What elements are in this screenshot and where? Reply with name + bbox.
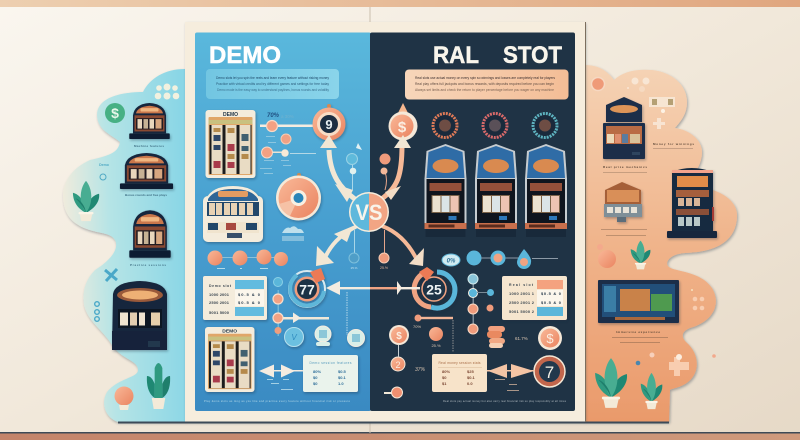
arrows around VS <box>316 135 424 335</box>
blue coin <box>274 278 282 286</box>
coin with dollar sign: $ <box>398 119 407 136</box>
cactus plant <box>147 363 170 409</box>
caption: Real prize mechanics <box>603 165 647 169</box>
icon: blue cross <box>105 269 117 281</box>
real info box: $25 <box>467 369 474 374</box>
large slot machine <box>112 281 167 350</box>
dollar medallion: $ <box>546 331 554 346</box>
slot machine 3 <box>129 210 171 258</box>
coin stack <box>487 326 505 348</box>
coral node row <box>208 250 288 269</box>
slider track <box>260 124 320 127</box>
comparison table: $0.5 & 0 <box>238 300 261 305</box>
small label and badge: Demo <box>99 163 109 167</box>
caption: Immersive experience <box>616 330 660 334</box>
slot machine 1 <box>129 103 170 139</box>
lucky 7 dial <box>534 356 565 387</box>
description box <box>405 70 568 100</box>
footnote: Real slots pay actual money but also carry real financial risk so play responsibly at all times <box>443 399 567 403</box>
panel: left teal blob <box>63 69 185 422</box>
small plant <box>641 373 662 409</box>
stat label <box>267 113 294 119</box>
caption 3: Practice sessions <box>130 263 166 267</box>
real slot machine 3 <box>525 144 567 237</box>
caption: Money for winnings <box>653 142 694 146</box>
icon: peach dots <box>691 289 704 310</box>
real info box: $1 <box>442 381 447 386</box>
icon: three blue rings <box>95 302 99 321</box>
description box <box>206 69 339 99</box>
icon: dollar coin: $ <box>111 105 119 121</box>
vs badge <box>349 192 389 232</box>
large plant <box>595 358 627 408</box>
footnote: Play demo slots as long as you like and practise every feature without financial risk or pressure <box>204 399 351 403</box>
description box: Always set limits and check the return to player percentage before you wager on any machine <box>415 88 554 92</box>
droplet node: 25.% <box>380 266 388 270</box>
droplet node <box>379 230 389 270</box>
arrow: up left <box>320 135 356 202</box>
real slot machine 1 <box>424 144 466 237</box>
demo info box: 80% <box>313 369 321 374</box>
flow node <box>266 120 278 132</box>
coral coin left <box>389 325 409 345</box>
caption 1: Machine features <box>134 144 164 148</box>
donut gauge <box>276 173 321 220</box>
decorative dots and plus <box>636 352 689 376</box>
gauge: 77 <box>289 268 325 307</box>
comparison table: 5001 5000 <box>209 310 230 315</box>
caption <box>653 142 694 149</box>
medallion 2 <box>483 114 507 138</box>
comparison table: Demo slot <box>209 284 232 288</box>
description box: Practice with virtual credits and try different games and settings for free today <box>216 82 329 86</box>
blue droplet nodes <box>346 143 362 190</box>
percent badge: 0% <box>447 258 456 264</box>
real table: 1000 2001 1 <box>509 291 535 296</box>
stat label: 37% <box>415 367 426 373</box>
heading: RAL STOT <box>433 42 562 69</box>
coral coin <box>597 244 616 268</box>
real slot machine 2 <box>604 182 642 222</box>
stat label: 70% <box>267 113 280 119</box>
arrow: horizontal link <box>326 281 420 295</box>
caption <box>612 330 668 343</box>
icon: film strip <box>649 97 675 113</box>
comparison table <box>203 276 267 320</box>
icon: peach coin <box>592 78 604 90</box>
real table: $0.5 & 0 <box>541 300 562 305</box>
arrow: down left <box>316 226 357 266</box>
demo info box: Demo session features <box>310 361 352 365</box>
stat label: 61.7% <box>515 336 528 341</box>
double arrow <box>487 364 535 378</box>
real info box: Real money session stats <box>438 361 481 365</box>
comparison table: $0.5 & 0 <box>238 292 261 297</box>
icon: cream dots <box>627 78 650 92</box>
coin ring with dark center <box>312 104 346 140</box>
gauge: 25 <box>414 267 455 308</box>
panel: demo side <box>195 32 371 411</box>
heading: DEMO: DEMO <box>209 42 281 69</box>
icon: green plant <box>73 181 99 221</box>
lucky 7 dial: 7 <box>545 363 554 382</box>
blue badge <box>284 328 304 346</box>
coral coin left: $ <box>396 331 402 342</box>
double arrow <box>259 364 304 378</box>
percent badge <box>442 254 460 266</box>
real slot machine 2 <box>475 144 517 237</box>
reel card top <box>206 110 256 178</box>
demo info box: $0.1 <box>338 375 347 380</box>
peach flow line <box>414 314 453 352</box>
stat label: 70% <box>413 324 421 329</box>
real info box <box>432 354 487 392</box>
coin small <box>429 327 443 341</box>
cream badge <box>348 330 364 346</box>
demo info box: $0.5 <box>338 369 347 374</box>
comparison table: 1000 2001 <box>209 292 230 297</box>
monitor <box>598 280 679 323</box>
description box: Demo mode is the easy way to understand paylines, bonus rounds and volatility <box>217 88 329 92</box>
coin with dollar sign <box>388 103 418 140</box>
small note <box>495 379 519 391</box>
caption 2: Bonus rounds and free plays <box>125 193 167 197</box>
icon: coral bulb <box>114 386 134 410</box>
caption <box>603 165 647 173</box>
blue mid node: 25.% <box>351 266 358 270</box>
arrow: down right <box>382 226 424 266</box>
real info box: $0 <box>442 375 447 380</box>
panel: center paper <box>118 22 669 424</box>
icon: dollar coin <box>105 103 125 123</box>
description box: Real play offers full jackpots and bonus rewards, with deposits required before you can begin <box>415 82 554 86</box>
icon: cream dots <box>155 84 179 100</box>
dollar medallion <box>538 326 562 350</box>
icon: plus sign <box>653 118 665 129</box>
gauge: 25: 25 <box>426 282 442 298</box>
small peach dot <box>712 354 716 358</box>
demo info box: $0 <box>313 381 318 386</box>
real info box: 80% <box>442 369 450 374</box>
stat label: 25.% <box>431 343 441 348</box>
description box: Real slots use actual money on every spin so winnings and losses are completely real for players <box>415 76 555 80</box>
real table <box>502 276 567 320</box>
comparison table: 2500 2001 <box>209 300 230 305</box>
reel card bottom <box>205 327 254 392</box>
description box: Demo slots let you spin the reels and learn every feature without risking money <box>216 76 329 80</box>
real table: $0.5 & 0 <box>541 291 562 296</box>
coin ring with dark center: 9 <box>325 117 333 132</box>
caption <box>601 229 647 236</box>
real table: Real slot <box>509 283 534 287</box>
flow node <box>281 134 291 144</box>
left coral nodes <box>384 345 405 398</box>
demo info box: 1.0 <box>338 381 344 386</box>
small label and badge <box>99 163 109 180</box>
real table: 2500 2001 2 <box>509 300 535 305</box>
coral droplets left <box>380 154 390 190</box>
blue and coral node row <box>466 249 558 269</box>
heading: RAL STOT: STOT <box>503 42 562 69</box>
heading: RAL STOT: RAL <box>433 42 479 69</box>
left coral nodes: 2 <box>395 360 401 370</box>
green plant <box>631 241 650 269</box>
medallion 3 <box>533 114 557 138</box>
tall slot machine <box>667 168 717 238</box>
vertical node chain <box>468 274 494 334</box>
medallion 1 <box>433 114 457 138</box>
stat label: a 30% <box>281 114 294 119</box>
cream badge <box>315 326 331 346</box>
panel: real slot side <box>370 32 575 411</box>
small note <box>267 379 293 390</box>
cloud icon <box>282 226 304 241</box>
real slot machine 1 <box>603 97 645 159</box>
dashed connector <box>346 292 348 335</box>
vs badge: VS <box>356 200 382 225</box>
small captions <box>260 136 291 174</box>
arrow: up right <box>380 135 411 200</box>
panel: right peach blob <box>585 65 737 422</box>
medallions <box>433 114 557 138</box>
gauge: 77: 77 <box>299 282 315 298</box>
slot machine 2 <box>120 153 173 189</box>
real info box: 0.0 <box>467 381 473 386</box>
wide slot machine <box>203 186 263 242</box>
real info box: $0.1 <box>467 375 476 380</box>
demo info box: $0 <box>313 375 318 380</box>
blue mid node <box>349 230 359 270</box>
vertical node chain <box>273 290 329 336</box>
blue badge: V <box>291 333 297 342</box>
demo info box <box>303 355 358 392</box>
flow node with line <box>262 147 316 158</box>
real table: 5001 5000 2 <box>509 309 535 314</box>
